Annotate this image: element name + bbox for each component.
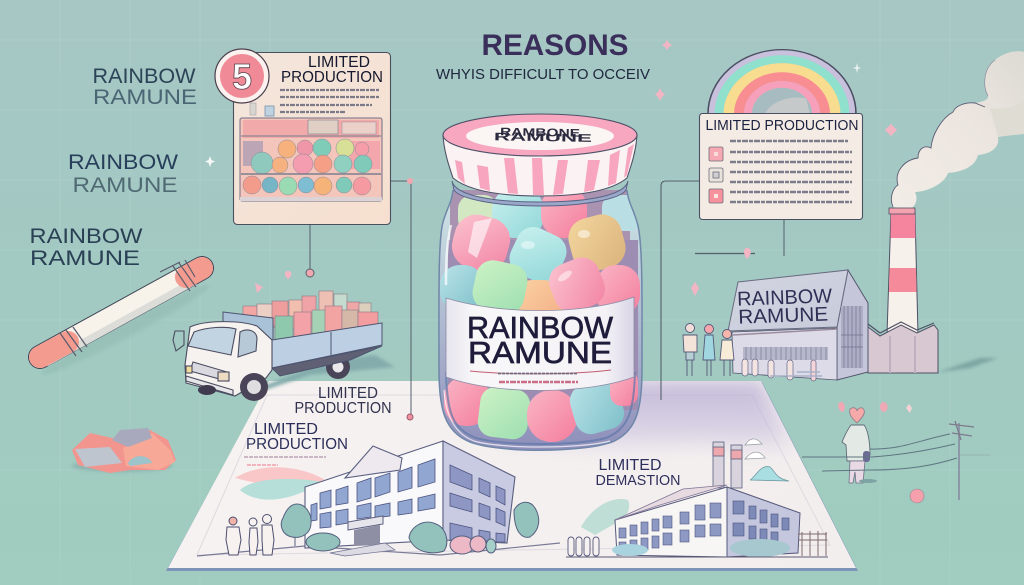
three students	[226, 514, 274, 555]
heading: limited demastion: DEMASTION	[596, 473, 680, 489]
rainbow ramune label top: RAMUNE	[93, 86, 197, 109]
sawtooth shed	[868, 322, 938, 373]
sparkle near rainbow	[853, 63, 861, 73]
factory with chimney	[683, 208, 998, 381]
paper sheet with campus scenes	[166, 381, 858, 571]
person with heart balloon	[842, 408, 877, 483]
truck shadow	[240, 355, 395, 395]
jar label text: RAINBOW	[467, 310, 614, 345]
rainbow ramune label middle: RAMUNE	[72, 174, 178, 197]
heading: limited production two: PRODUCTION	[246, 436, 348, 453]
candy display shelf	[240, 118, 382, 201]
front wheels	[198, 373, 268, 401]
fine print	[244, 457, 326, 465]
jar neck ring	[452, 181, 628, 206]
ground line	[197, 543, 560, 556]
factory chimneys	[713, 442, 742, 488]
heading: limited demastion	[596, 457, 680, 489]
glass shine and outline	[439, 190, 642, 450]
card body text	[730, 141, 852, 202]
rainbow ramune label middle: RAINBOW	[68, 151, 178, 174]
connector lines and dots	[306, 178, 784, 420]
card body text	[280, 90, 379, 112]
card title: PRODUCTION	[281, 69, 383, 86]
rear wheel	[326, 355, 350, 379]
lid text: RAMUNE	[494, 131, 592, 145]
candy pen	[37, 260, 213, 382]
subtitle: WHYIS DIFFICULT TO OCCEIV	[436, 67, 650, 83]
school building	[305, 441, 515, 556]
rainbow arch	[708, 50, 856, 114]
heading: limited production two: LIMITED	[254, 421, 318, 438]
rainbow ramune label lower	[30, 225, 143, 270]
jar glass	[439, 190, 642, 450]
candies	[440, 186, 642, 442]
candy jar	[439, 114, 642, 450]
delivery truck with ramune packs	[173, 291, 395, 401]
peach ball	[910, 489, 924, 503]
warehouse	[728, 270, 868, 380]
number badge five: 5	[232, 56, 252, 97]
landscape cloud	[235, 467, 325, 500]
candy highlights	[468, 218, 492, 258]
rainbow ramune label top	[92, 65, 197, 109]
card title: LIMITED PRODUCTION	[706, 118, 858, 134]
rainbow ramune label middle	[68, 151, 178, 197]
three visitors	[683, 324, 734, 376]
lid text: RAMBONE	[500, 126, 580, 140]
sparkles and hearts	[205, 40, 912, 413]
truck cab	[173, 322, 272, 396]
lid text	[494, 126, 592, 145]
factory visitors	[568, 537, 599, 556]
jar label text	[467, 310, 614, 370]
card title	[281, 54, 383, 86]
rainbow ramune label lower: RAINBOW	[30, 225, 143, 248]
clouds	[581, 439, 789, 535]
utility pole and wires	[802, 421, 990, 500]
scattered packaging pile	[72, 428, 176, 473]
card: limited production with rainbow	[700, 50, 862, 220]
cargo packs	[243, 291, 378, 341]
rainbow ramune label lower: RAMUNE	[30, 247, 140, 270]
card: limited production with number five	[215, 49, 390, 224]
smoke plume	[891, 51, 1024, 208]
rainbow ramune label top: RAINBOW	[92, 65, 196, 88]
title: REASONS	[482, 29, 628, 62]
entrance	[330, 516, 395, 556]
heading: limited production one	[294, 385, 392, 417]
card title: LIMITED	[308, 54, 370, 71]
heading: limited demastion: LIMITED	[598, 457, 662, 474]
truck bed	[223, 312, 382, 376]
heading: limited production one: LIMITED	[318, 385, 378, 402]
heading: limited production two	[246, 421, 348, 453]
warehouse sign text	[737, 285, 833, 329]
checklist icons	[709, 147, 723, 203]
title block	[436, 29, 650, 83]
jar label	[446, 297, 634, 390]
ground shadow	[938, 358, 998, 372]
trees and shrubs	[281, 502, 539, 554]
heading: limited production one: PRODUCTION	[294, 400, 392, 417]
chimney	[887, 208, 918, 335]
factory building	[615, 485, 800, 557]
queue of customers	[742, 359, 822, 381]
warehouse sign text: RAINBOW	[737, 285, 833, 311]
number badge five	[215, 49, 269, 103]
small card icon	[250, 103, 274, 116]
jar lid	[443, 114, 637, 196]
jar label text: RAMUNE	[468, 335, 612, 370]
factory fence and shrubs	[566, 531, 828, 557]
warehouse sign text: RAMUNE	[738, 304, 829, 329]
